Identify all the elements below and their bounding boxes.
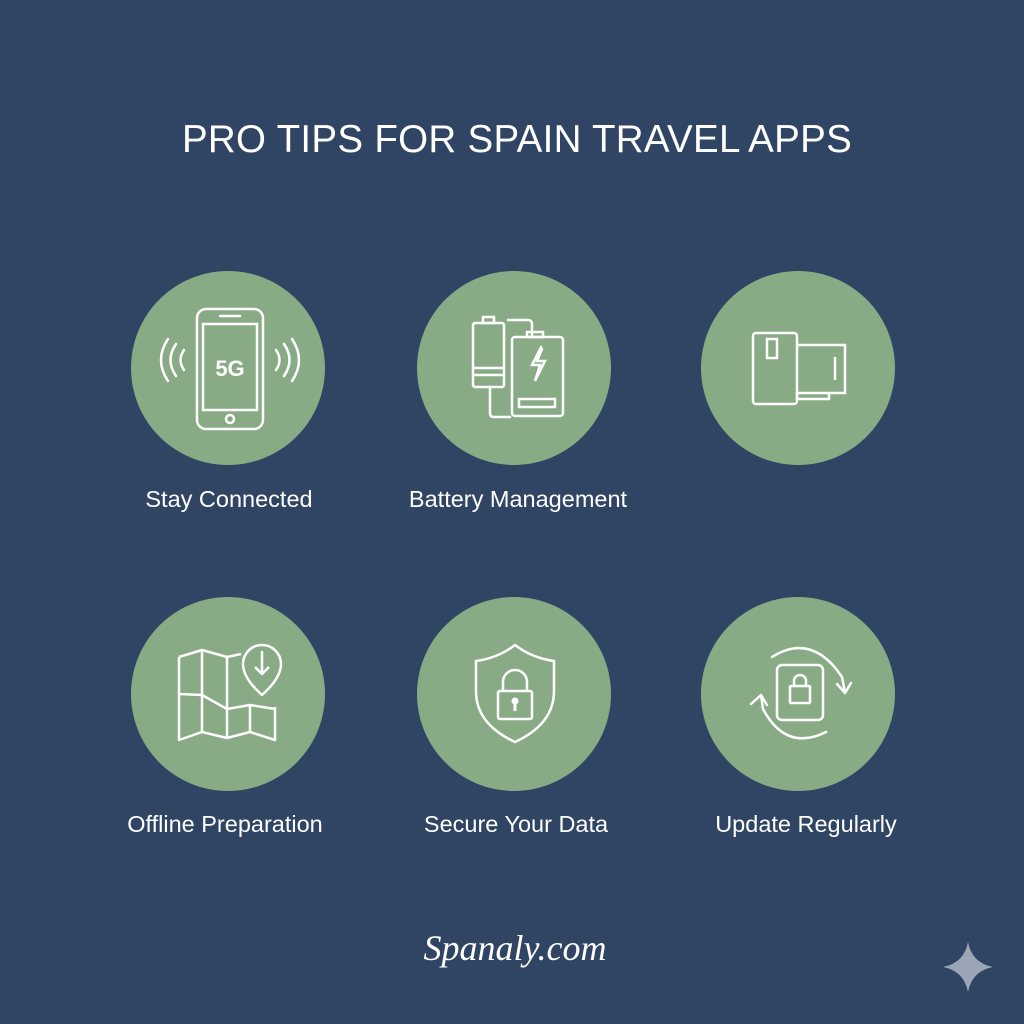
icon: cards (753, 333, 845, 404)
footer brand: Spanaly.com (424, 928, 606, 968)
panel: battery management (409, 271, 628, 512)
panel: stay connected (131, 271, 325, 512)
label: Stay Connected (145, 486, 313, 512)
label: Battery Management (409, 486, 628, 512)
label: Update Regularly (715, 811, 897, 837)
icon: refresh lock (751, 648, 851, 738)
icon: map with pin (179, 645, 281, 740)
label: Offline Preparation (127, 811, 323, 837)
panel: stay connected: 5G (215, 356, 245, 381)
icon: sparkle (943, 942, 993, 992)
panel: offline preparation (127, 597, 325, 837)
panel: update regularly (701, 597, 897, 837)
icon: batteries (473, 317, 563, 417)
label: Secure Your Data (424, 811, 609, 837)
icon: 5G phone (161, 309, 299, 429)
panel: sim card (701, 271, 895, 465)
panel: secure your data (417, 597, 611, 837)
icon: shield lock (476, 645, 554, 742)
title: PRO TIPS FOR SPAIN TRAVEL APPS (182, 118, 852, 161)
